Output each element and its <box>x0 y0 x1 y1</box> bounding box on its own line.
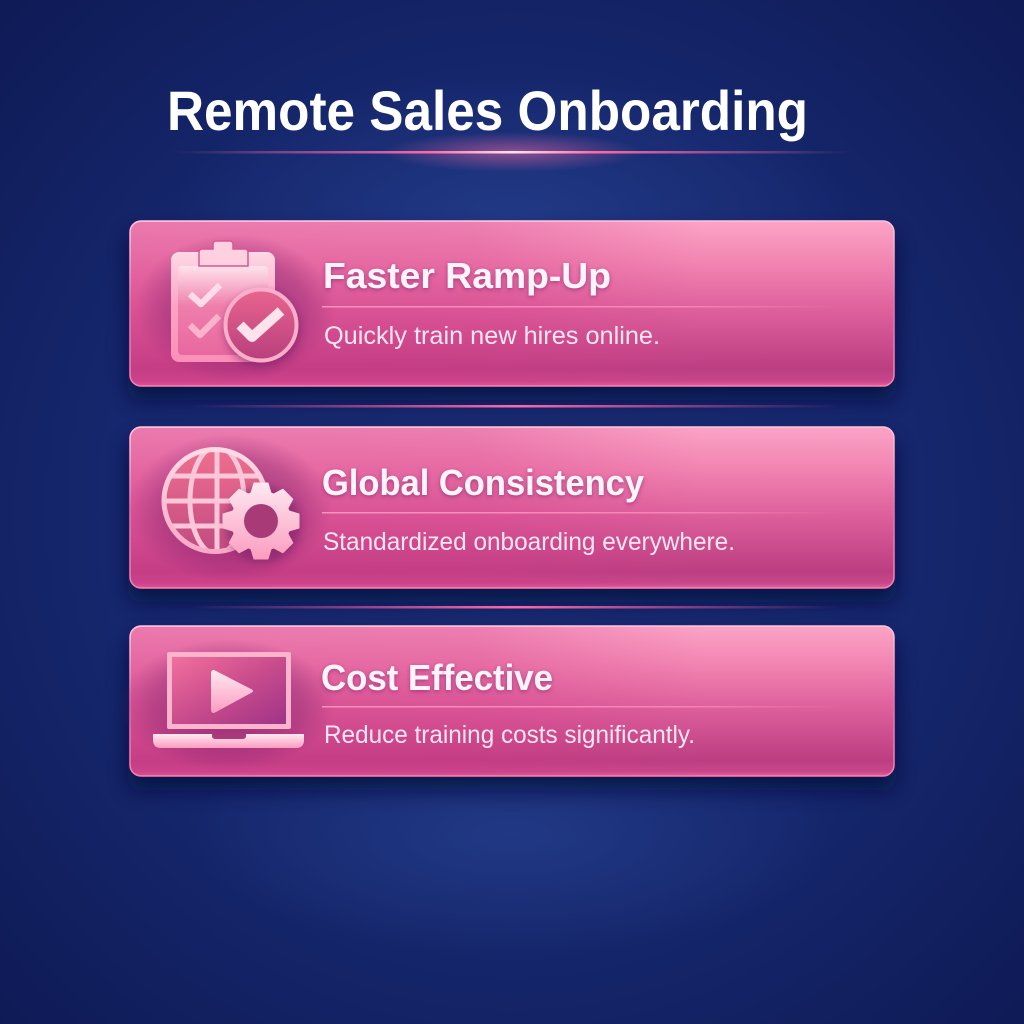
heading: Global Consistency <box>322 462 644 503</box>
separator glow <box>190 606 840 608</box>
panel: faster ramp-up <box>128 221 896 400</box>
heading: Faster Ramp-Up <box>323 255 611 296</box>
description: Standardized onboarding everywhere. <box>323 528 735 556</box>
icon: laptop with play button <box>153 652 304 748</box>
icon: globe with gear <box>160 445 301 563</box>
title glow divider <box>175 132 850 172</box>
separator glow <box>190 405 840 408</box>
description: Reduce training costs significantly. <box>324 721 695 749</box>
panel: cost effective <box>120 626 896 790</box>
panel: global consistency <box>128 427 896 602</box>
icon: clipboard with check badge <box>171 241 300 367</box>
heading: Cost Effective <box>321 657 553 698</box>
description: Quickly train new hires online. <box>324 322 660 350</box>
title: Remote Sales Onboarding <box>167 79 808 142</box>
